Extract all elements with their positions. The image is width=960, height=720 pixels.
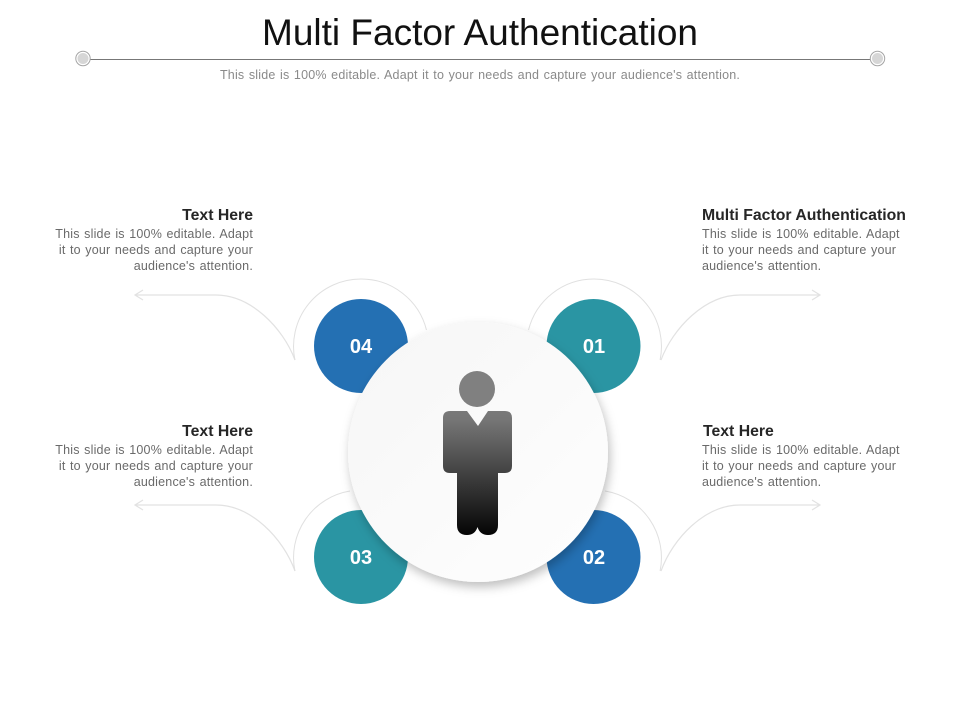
text block: bottom left: audience's attention. xyxy=(134,475,253,489)
circle 04 xyxy=(314,299,408,393)
arrow: top left xyxy=(135,290,295,360)
circle 02 xyxy=(546,510,640,604)
text block: top left xyxy=(55,207,253,273)
circle 04: 04 xyxy=(350,336,373,358)
text block: top left: audience's attention. xyxy=(134,259,253,273)
text block: top right: it to your needs and capture your xyxy=(702,243,896,257)
arrow: top right xyxy=(661,290,820,360)
text block: top right: This slide is 100% editable. Adapt xyxy=(702,227,900,241)
text block: bottom left: it to your needs and capture your xyxy=(59,459,253,473)
text block: top left: This slide is 100% editable. Adapt xyxy=(55,227,253,241)
text block: top left: it to your needs and capture your xyxy=(59,243,253,257)
circle 02: 02 xyxy=(583,547,605,569)
arrow: bottom right xyxy=(661,500,820,571)
text block: top right xyxy=(702,207,906,273)
arrow: bottom left xyxy=(135,500,295,571)
central white disc xyxy=(348,322,608,582)
text block: bottom left: Text Here xyxy=(182,423,253,440)
text block: bottom left xyxy=(55,423,253,489)
circle 01 xyxy=(546,299,640,393)
text block: bottom right: it to your needs and capture your xyxy=(702,459,896,473)
arc: 03 xyxy=(294,491,350,571)
title: Multi Factor Authentication xyxy=(262,12,698,53)
text block: top right: Multi Factor Authentication xyxy=(702,207,906,224)
circle 03: 03 xyxy=(350,547,372,569)
text block: bottom right: This slide is 100% editable. Adapt xyxy=(702,443,900,457)
text block: bottom left: This slide is 100% editable. Adapt xyxy=(55,443,253,457)
icon: person body xyxy=(443,411,512,535)
text block: bottom right: Text Here xyxy=(703,423,774,440)
text block: bottom right xyxy=(702,423,900,489)
arc: 02 xyxy=(605,491,661,571)
icon: person head xyxy=(459,371,495,407)
arc: 01 xyxy=(528,279,661,360)
arc: 04 xyxy=(294,279,426,360)
circle 03 xyxy=(314,510,408,604)
text block: top left: Text Here xyxy=(182,207,253,224)
text block: top right: audience's attention. xyxy=(702,259,821,273)
subtitle: This slide is 100% editable. Adapt it to your needs and capture your audience's attention. xyxy=(220,68,740,82)
text block: bottom right: audience's attention. xyxy=(702,475,821,489)
circle 01: 01 xyxy=(583,336,605,358)
